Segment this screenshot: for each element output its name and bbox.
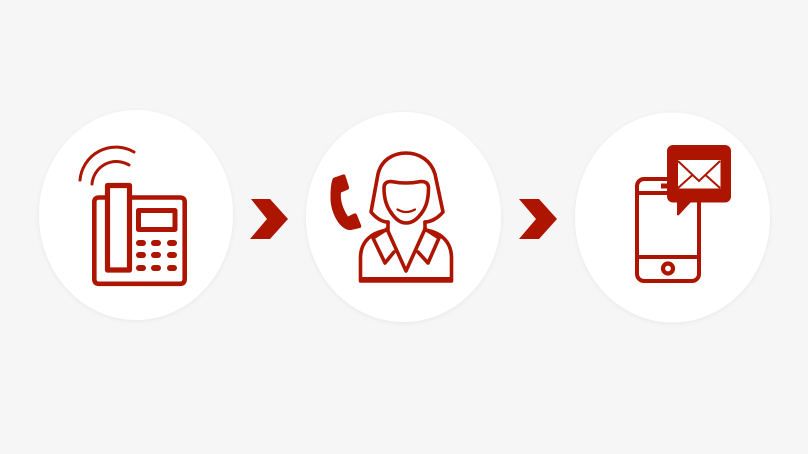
panel: mobile message step [575,112,770,322]
icon: desk phone [80,147,185,284]
body [360,222,452,281]
arrow: first chevron [250,199,288,239]
panel: operator step [306,112,501,322]
hair [371,153,443,222]
icon: smartphone [637,179,699,281]
smile [398,210,415,212]
icon: woman operator [360,153,452,281]
icon: message bubble [667,145,731,216]
arrow: second chevron [519,199,557,239]
panel: desk phone step [39,110,233,320]
face [384,182,428,223]
icon: handset [330,174,361,230]
icon: envelope [678,160,720,188]
icon: keypad [136,240,177,271]
collar [373,229,439,271]
